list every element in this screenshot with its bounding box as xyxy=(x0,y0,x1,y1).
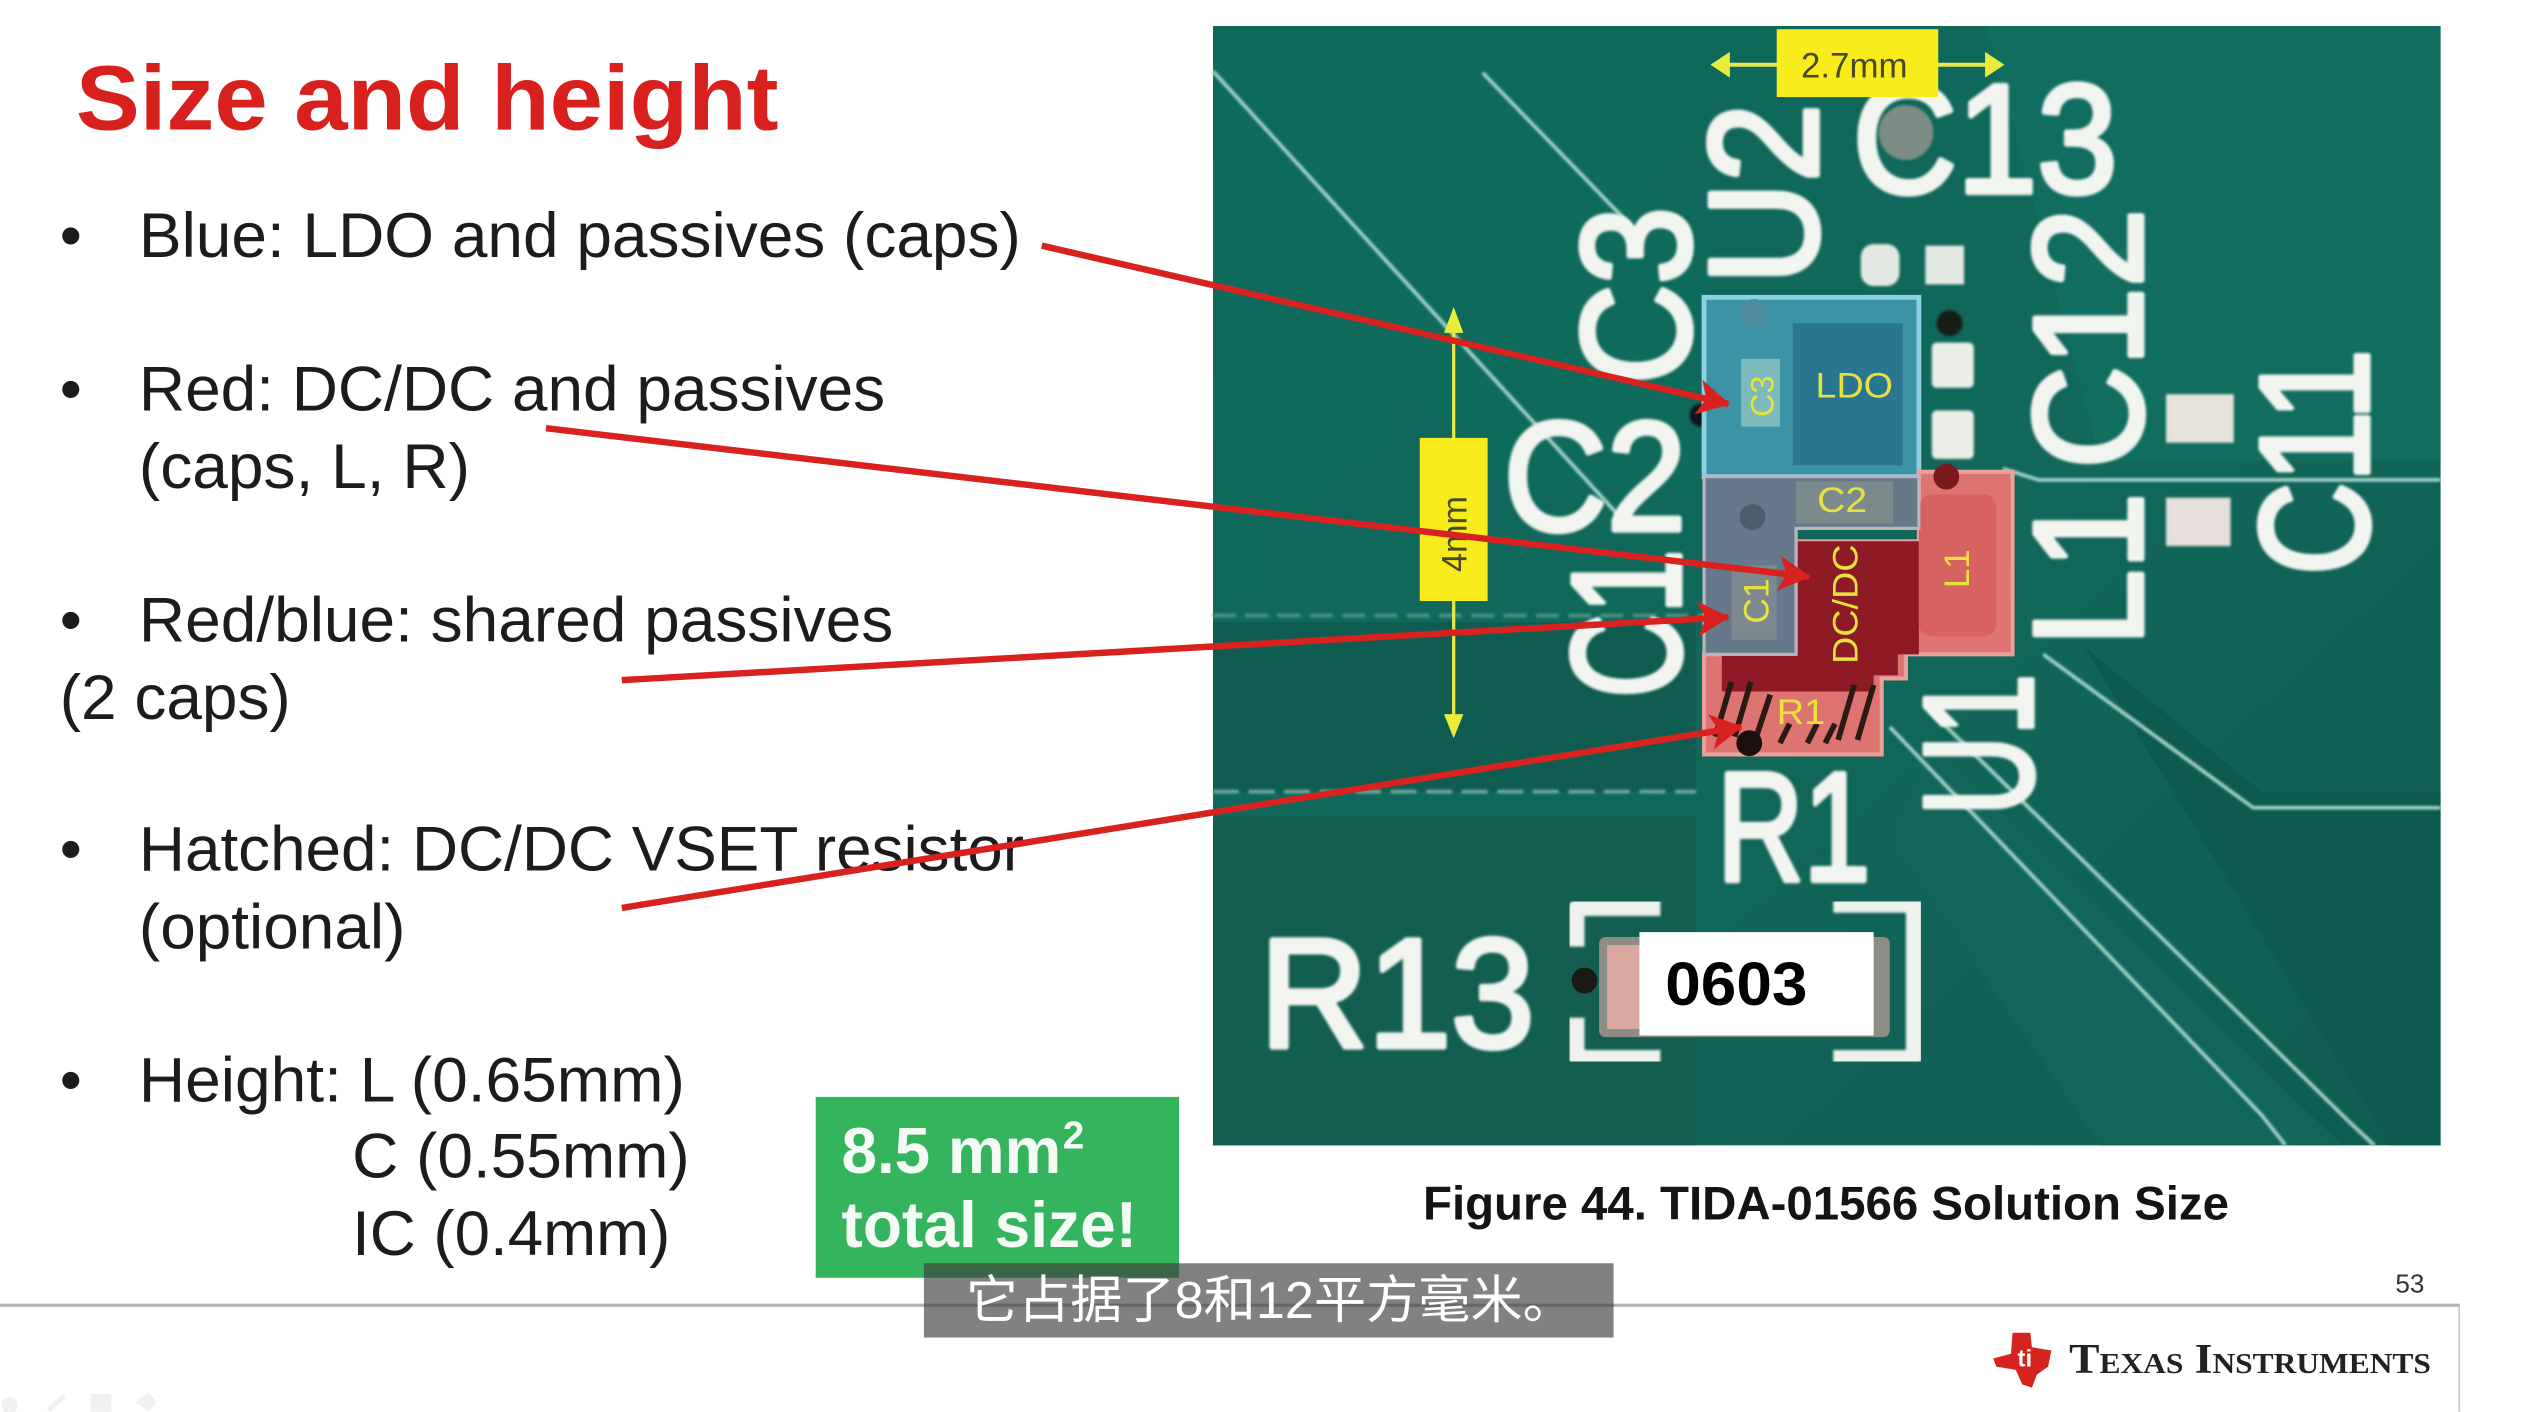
silkscreen labels: C1 xyxy=(1540,549,1713,698)
callout: total size: 8.5 mm xyxy=(842,1115,1061,1187)
overlay: red DC/DC region xyxy=(1704,464,2013,754)
bullet: red/blue xyxy=(60,585,893,733)
arrow: shared caps xyxy=(622,617,1728,680)
silkscreen labels: C11 xyxy=(2228,349,2401,575)
silkscreen labels: C12 xyxy=(2002,209,2175,469)
footer rule and frame xyxy=(0,1304,2460,1412)
panel: PCB photo xyxy=(1213,26,2441,1145)
component outline: R13 brackets xyxy=(1576,905,1914,1058)
overlay: hatched VSET resistor: R1 xyxy=(1777,692,1825,732)
subtitle caption xyxy=(924,1263,1614,1338)
0603 resistor with label xyxy=(1572,932,1890,1037)
bullet: red xyxy=(60,354,885,502)
bullet: red/blue: • xyxy=(60,585,82,655)
board copper shading xyxy=(1213,26,2441,1145)
bullet: hatched: Hatched: DC/DC VSET resistor xyxy=(139,815,1024,885)
silkscreen labels: L1 xyxy=(2002,493,2175,646)
bullet: height xyxy=(60,1046,690,1269)
bullet: red: (caps, L, R) xyxy=(139,432,470,502)
logo: Texas Instruments: Texas Instruments xyxy=(2069,1337,2431,1383)
arrow: hatched resistor xyxy=(622,727,1741,908)
0603 resistor with label: 0603 xyxy=(1665,950,1807,1019)
height dimension 4mm xyxy=(1420,307,1488,738)
overlay: red DC/DC region: DC/DC xyxy=(1825,544,1865,664)
silkscreen labels xyxy=(1260,52,2401,1080)
overlay: blue LDO region: LDO xyxy=(1815,365,1893,405)
bullet: hatched: • xyxy=(60,815,82,885)
bullet: red: Red: DC/DC and passives xyxy=(139,354,885,424)
callout: total size: 2 xyxy=(1063,1115,1084,1158)
bullet: height: • xyxy=(60,1046,82,1116)
bullet: height: Height: L (0.65mm) xyxy=(139,1046,685,1116)
bullet: blue: Blue: LDO and passives (caps) xyxy=(139,201,1021,271)
figure caption: Figure 44. TIDA-01566 Solution Size xyxy=(1423,1178,2229,1230)
width dimension 2.7mm xyxy=(1711,29,2004,97)
icon: TI map mark: ti xyxy=(2017,1346,2032,1373)
overlay: hatched VSET resistor xyxy=(1715,682,1874,756)
icon: TI map mark xyxy=(1993,1333,2051,1388)
silkscreen labels: U2 xyxy=(1677,104,1850,284)
subtitle caption: 它占据了8和12平方毫米。 xyxy=(966,1271,1575,1329)
bullet: red: • xyxy=(60,354,82,424)
silkscreen labels: R13 xyxy=(1260,907,1534,1080)
title: Size and height xyxy=(76,46,779,149)
callout: total size: total size! xyxy=(842,1189,1137,1261)
board traces xyxy=(1213,71,2441,1145)
bullet: red/blue: Red/blue: shared passives xyxy=(139,585,893,655)
bullet: height: C (0.55mm) xyxy=(352,1122,690,1192)
bullet: hatched: (optional) xyxy=(139,892,405,962)
arrows from bullets to board xyxy=(546,246,1809,908)
overlay: blue LDO region xyxy=(1704,297,1919,477)
overlay: shared caps region: C1 xyxy=(1737,578,1777,624)
silkscreen labels: C13 xyxy=(1853,52,2118,225)
overlay: shared caps region xyxy=(1704,477,1919,654)
height dimension 4mm: 4mm xyxy=(1435,496,1475,572)
silkscreen labels: C3 xyxy=(1550,207,1723,385)
bullet: height: IC (0.4mm) xyxy=(352,1199,670,1269)
silkscreen labels: U1 xyxy=(1892,674,2065,816)
page number: 53 xyxy=(2395,1270,2424,1298)
faint player controls xyxy=(2,1392,157,1412)
logo: Texas Instruments xyxy=(1993,1333,2431,1388)
bullet: hatched xyxy=(60,815,1024,962)
pads and vias xyxy=(1690,105,2234,546)
silkscreen labels: R1 xyxy=(1717,740,1870,913)
bullet list xyxy=(60,201,1024,1269)
overlay: shared caps region: C2 xyxy=(1817,480,1867,520)
overlay: red DC/DC region: L1 xyxy=(1937,549,1977,588)
overlay: blue LDO region: C3 xyxy=(1744,376,1780,417)
callout: total size xyxy=(816,1097,1179,1278)
arrow: red to DC/DC xyxy=(546,428,1809,577)
bullet: red/blue: (2 caps) xyxy=(60,663,291,733)
arrow: blue to LDO xyxy=(1042,246,1728,404)
silkscreen labels: C2 xyxy=(1504,390,1686,563)
bullet: blue: • xyxy=(60,201,82,271)
width dimension 2.7mm: 2.7mm xyxy=(1801,46,1908,86)
